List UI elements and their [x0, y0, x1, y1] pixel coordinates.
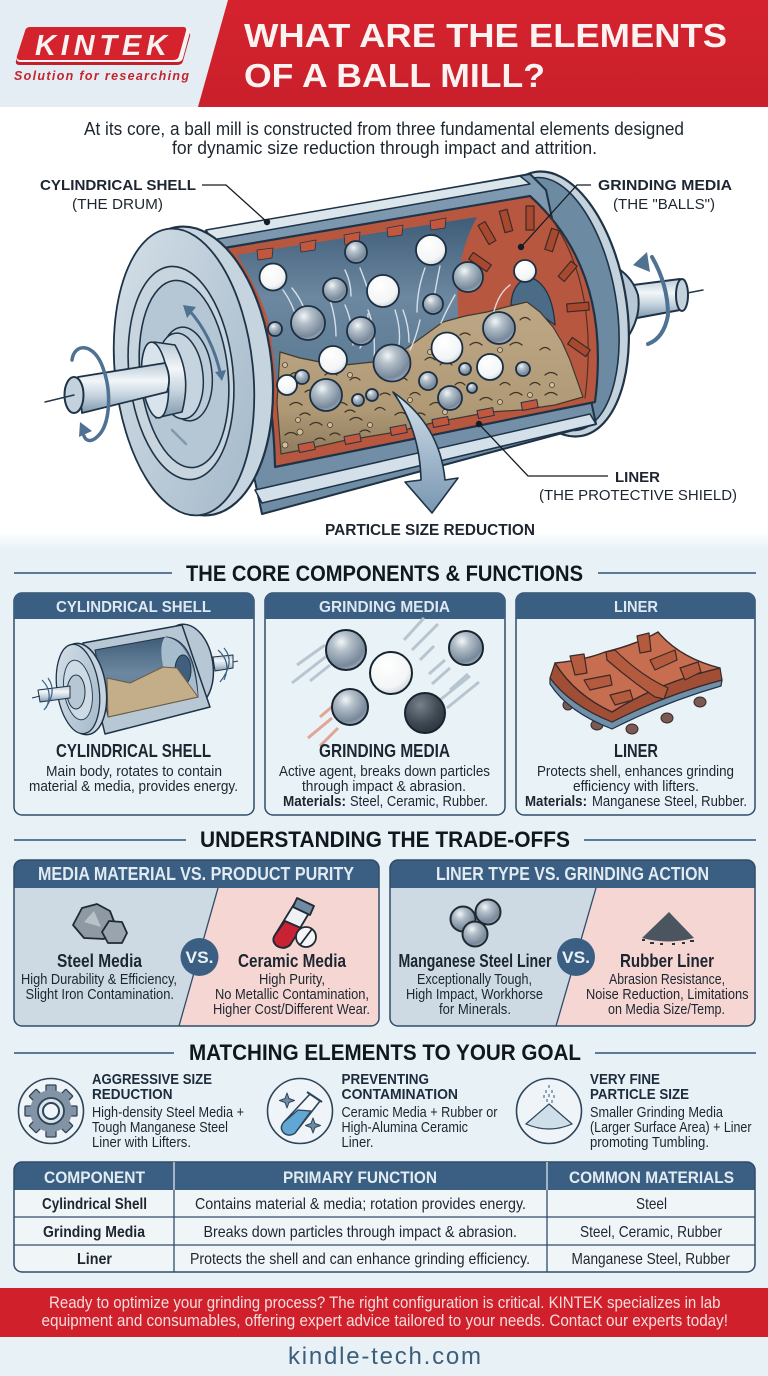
icon: fine powder pile: [516, 1078, 582, 1144]
summary table: Steel, Ceramic, Rubber: [580, 1224, 723, 1241]
goal: very fine particle size: [516, 1071, 752, 1151]
ground material: [277, 302, 583, 454]
summary table: Contains material & media; rotation provides energy.: [195, 1196, 526, 1213]
header band: [0, 0, 768, 107]
badge: vs: [180, 938, 218, 976]
intro text: for dynamic size reduction through impact and attrition.: [172, 137, 597, 158]
callout: grinding media: [518, 177, 732, 250]
intro text: [84, 118, 684, 158]
callout: grinding media: (THE "BALLS"): [613, 196, 715, 213]
panel: liner: LINER: [614, 741, 658, 761]
goal: very fine particle size: Smaller Grinding Media: [590, 1105, 724, 1121]
call to action band: Ready to optimize your grinding process? The right configuration is critical. KINTEK specializes in lab: [49, 1294, 720, 1312]
summary table: COMMON MATERIALS: [569, 1168, 734, 1187]
goal: aggressive size reduction: High-density Steel Media +: [92, 1105, 244, 1121]
icon: clean test tube: [268, 1078, 332, 1144]
panel: cylindrical shell: material & media, provides energy.: [29, 779, 238, 795]
panel: liner type vs grinding action: High Impact, Workhorse: [406, 987, 543, 1003]
summary table: Manganese Steel, Rubber: [572, 1251, 731, 1268]
grinding balls: [260, 235, 536, 411]
goal: preventing contamination: [268, 1071, 498, 1151]
goal: very fine particle size: promoting Tumbling.: [590, 1135, 709, 1151]
icon: liner segment: [550, 632, 722, 734]
logo: KINTEK: [14, 27, 190, 83]
summary table: Liner: [77, 1251, 112, 1268]
panel: liner: LINER: [614, 599, 658, 616]
goal: preventing contamination: PREVENTING: [342, 1071, 429, 1088]
right end ring: [468, 160, 648, 448]
title: [244, 17, 727, 94]
panel: media material vs product purity: Ceramic Media: [238, 951, 347, 971]
panel: liner type vs grinding action: for Minerals.: [439, 1002, 511, 1018]
summary table: [14, 1162, 755, 1272]
panel: media material vs product purity: MEDIA MATERIAL VS. PRODUCT PURITY: [38, 864, 354, 884]
badge: vs: VS.: [186, 948, 214, 967]
ball mill illustration: [45, 160, 703, 523]
intro text: At its core, a ball mill is constructed from three fundamental elements designed: [84, 118, 684, 139]
panel: liner type vs grinding action: Rubber Liner: [620, 951, 714, 971]
panel: liner: Protects shell, enhances grinding: [537, 764, 734, 780]
panel: grinding media: Active agent, breaks down particles: [279, 764, 490, 780]
goal: aggressive size reduction: Tough Manganese Steel: [92, 1120, 228, 1136]
goal: aggressive size reduction: [18, 1071, 244, 1151]
panel: grinding media: GRINDING MEDIA: [319, 599, 450, 616]
panel: grinding media: Materials:: [283, 794, 346, 810]
callout: liner: [476, 421, 737, 504]
icon: steel rock: [73, 904, 127, 943]
goal: aggressive size reduction: REDUCTION: [92, 1086, 172, 1103]
caption: particle size reduction: PARTICLE SIZE REDUCTION: [325, 522, 535, 539]
callout: liner: LINER: [615, 469, 660, 486]
panel: liner type vs grinding action: on Media Size/Temp.: [608, 1002, 725, 1018]
callout: cylindrical shell: CYLINDRICAL SHELL: [40, 177, 196, 194]
summary table: PRIMARY FUNCTION: [283, 1168, 437, 1187]
output arrow: [393, 392, 458, 513]
callout: cylindrical shell: (THE DRUM): [72, 196, 163, 213]
panel: media material vs product purity: No Metallic Contamination,: [215, 987, 369, 1003]
panel: liner type vs grinding action: Manganese Steel Liner: [398, 951, 552, 971]
panel: cylindrical shell: Main body, rotates to contain: [46, 764, 222, 780]
summary table: Cylindrical Shell: [42, 1196, 147, 1213]
drum interior: [237, 217, 477, 395]
inner curve of the liner: [545, 210, 588, 398]
panel: media material vs product purity: Slight Iron Contamination.: [26, 987, 174, 1003]
panel: cylindrical shell: [14, 593, 254, 815]
right shaft: [612, 265, 703, 345]
logo: KINTEK: KINTEK: [35, 30, 169, 62]
website link: kindle-tech.com: [288, 1343, 481, 1370]
goal: preventing contamination: Liner.: [342, 1135, 374, 1151]
heading: matching elements: MATCHING ELEMENTS TO YOUR GOAL: [189, 1040, 581, 1065]
title: OF A BALL MILL?: [244, 57, 545, 94]
panel: liner type vs grinding action: Abrasion Resistance,: [609, 972, 725, 988]
callout: grinding media: GRINDING MEDIA: [598, 177, 732, 194]
goal: preventing contamination: CONTAMINATION: [342, 1086, 458, 1103]
panel: grinding media: [265, 593, 505, 815]
panel: cylindrical shell: CYLINDRICAL SHELL: [56, 599, 211, 616]
summary table: Steel: [636, 1196, 667, 1213]
goal: preventing contamination: Ceramic Media + Rubber or: [342, 1105, 498, 1121]
goal: aggressive size reduction: Liner with Lifters.: [92, 1135, 191, 1151]
panel: media material vs product purity: Steel Media: [57, 951, 143, 971]
heading: trade-offs: UNDERSTANDING THE TRADE-OFFS: [200, 827, 570, 852]
liner opening: [224, 196, 598, 467]
panel: liner: [516, 593, 755, 815]
panel: media material vs product purity: Higher Cost/Different Wear.: [213, 1002, 370, 1018]
callout: cylindrical shell: [40, 177, 270, 225]
rotation arrows: [72, 252, 668, 444]
icon: media balls: [292, 618, 483, 746]
icon: steel balls: [450, 900, 500, 946]
panel: liner: efficiency with lifters.: [573, 779, 699, 795]
panel: grinding media: through impact & abrasion.: [302, 779, 466, 795]
heading: core components: THE CORE COMPONENTS & FUNCTIONS: [186, 561, 583, 586]
summary table: Grinding Media: [43, 1224, 145, 1241]
back wall hole: [511, 277, 555, 325]
goal: very fine particle size: VERY FINE: [590, 1071, 660, 1088]
goal: preventing contamination: High-Alumina Ceramic: [342, 1120, 468, 1136]
panel: liner type vs grinding action: Exceptionally Tough,: [417, 972, 532, 988]
logo: KINTEK: Solution for researching: [14, 69, 189, 83]
panel: liner type vs grinding action: [390, 860, 755, 1026]
panel: liner: Manganese Steel, Rubber.: [592, 794, 747, 810]
panel: liner type vs grinding action: Noise Reduction, Limitations: [586, 987, 748, 1003]
icon: gear: [18, 1078, 84, 1144]
bottom lifters: [298, 400, 538, 452]
icon: small drum: [32, 621, 238, 738]
panel: media material vs product purity: High Durability & Efficiency,: [21, 972, 177, 988]
shell body: [202, 174, 596, 514]
summary table: Breaks down particles through impact & abrasion.: [204, 1224, 517, 1241]
goal: aggressive size reduction: AGGRESSIVE SIZE: [92, 1071, 212, 1088]
icon: test tube and pill: [273, 898, 316, 948]
icon: rubber pile: [642, 912, 694, 944]
call to action band: [0, 1288, 768, 1337]
summary table: COMPONENT: [44, 1168, 146, 1187]
panel: liner: Materials:: [525, 794, 587, 810]
goal: very fine particle size: PARTICLE SIZE: [590, 1086, 689, 1103]
summary table: Protects the shell and can enhance grinding efficiency.: [190, 1251, 530, 1268]
call to action band: equipment and consumables, offering expert advice tailored to your needs. Contact our experts today!: [42, 1312, 728, 1330]
panel: media material vs product purity: [14, 860, 379, 1026]
callout: liner: (THE PROTECTIVE SHIELD): [539, 487, 737, 504]
panel: grinding media: GRINDING MEDIA: [319, 741, 450, 761]
badge: vs: [557, 938, 595, 976]
panel: media material vs product purity: High Purity,: [259, 972, 325, 988]
panel: cylindrical shell: CYLINDRICAL SHELL: [56, 741, 211, 761]
top lifters: [257, 218, 446, 260]
flange and hub: [45, 219, 287, 523]
motion streaks: [283, 266, 510, 360]
badge: vs: VS.: [562, 948, 590, 967]
panel: liner type vs grinding action: LINER TYPE VS. GRINDING ACTION: [436, 864, 709, 884]
title: WHAT ARE THE ELEMENTS: [244, 17, 727, 54]
back wall lifters: [469, 206, 590, 357]
panel: grinding media: Steel, Ceramic, Rubber.: [350, 794, 488, 810]
